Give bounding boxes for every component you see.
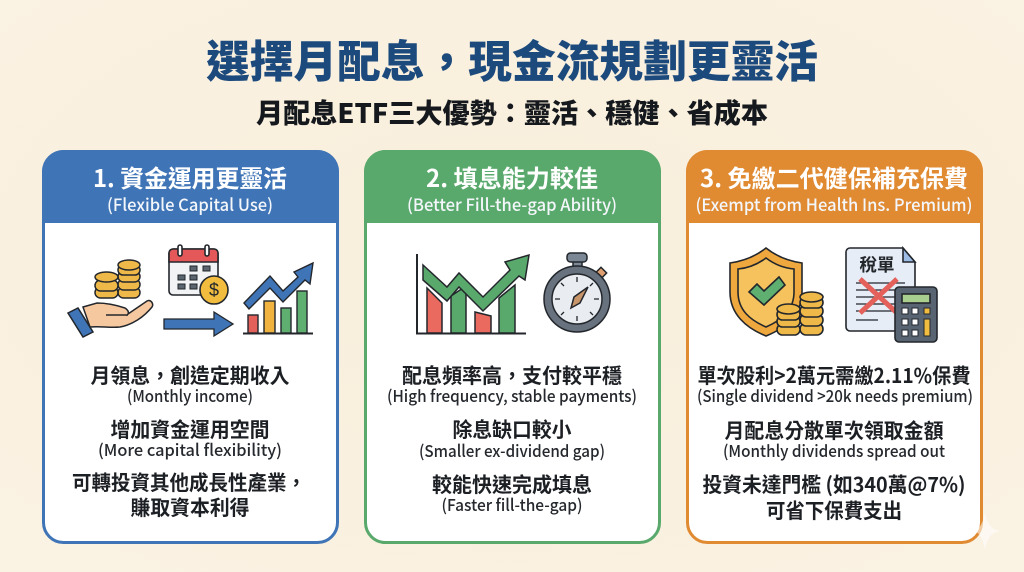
panel: exempt from health premium [686,150,983,542]
heading: card 2: 2. 填息能力較佳 [426,159,598,194]
panel: better fill-the-gap [364,150,661,542]
text: faster fill: 較能快速完成填息 [432,468,592,498]
panel: better fill-the-gap: (Smaller ex-dividend gap) [419,438,605,462]
panel: better fill-the-gap: (High frequency, stable payments) [387,383,637,407]
icon: fill-the-gap chart [417,254,529,334]
text: monthly income: 月領息，創造定期收入 [90,359,290,389]
heading: card 1: 1. 資金運用更靈活 [93,159,287,194]
subheading: card 1: (Flexible Capital Use) [107,191,273,216]
text: below threshold saving: 投資未達門檻 (如340萬@7%) [702,468,966,498]
icon: crossed tax bill with calculator: 稅單 [860,252,894,277]
subtitle: 月配息ETF三大優勢：靈活、穩健、省成本 [256,92,768,131]
icon: watermark sparkle [975,512,1000,550]
heading: card 3: 3. 免繳二代健保補充保費 [700,159,968,194]
panel: flexible capital use [42,150,339,542]
title: 選擇月配息，現金流規劃更靈活 [206,26,818,90]
panel header: green [364,150,661,223]
panel header: orange [686,150,983,223]
subheading: card 2: (Better Fill-the-gap Ability) [407,191,617,216]
panel: flexible capital use: 賺取資本利得 [130,491,250,521]
panel: flexible capital use: (Monthly income) [127,383,253,407]
panel: flexible capital use: (More capital flexibility) [98,437,282,461]
panel header: blue [42,150,339,223]
text: more capital flexibility: 增加資金運用空間 [110,413,270,443]
text: high frequency: 配息頻率高，支付較平穩 [402,359,622,389]
icon: shield with coins [730,248,823,336]
icon: growth bar chart [243,263,313,334]
icon: crossed tax bill with calculator [846,248,937,342]
arrow: blue right [164,312,233,336]
icon: calendar with dollar: $ [209,280,219,300]
icon: stopwatch [544,253,610,332]
text: smaller gap: 除息缺口較小 [452,413,572,443]
text: reinvest in growth: 可轉投資其他成長性產業， [72,466,306,496]
text: single dividend threshold: 單次股利>2萬元需繳2.11%保費 [698,359,970,389]
text: monthly spread: 月配息分散單次領取金額 [724,414,944,444]
icon: coins in hand [68,260,153,337]
icon: calendar with dollar [169,245,228,304]
panel: better fill-the-gap: (Faster fill-the-gap) [442,492,582,516]
panel: exempt from health premium: (Monthly dividends spread out [723,438,945,462]
panel: exempt from health premium: 可省下保費支出 [766,494,902,524]
panel: exempt from health premium: (Single dividend >20k needs premium) [697,383,973,407]
subheading: card 3: (Exempt from Health Ins. Premium) [696,191,972,216]
